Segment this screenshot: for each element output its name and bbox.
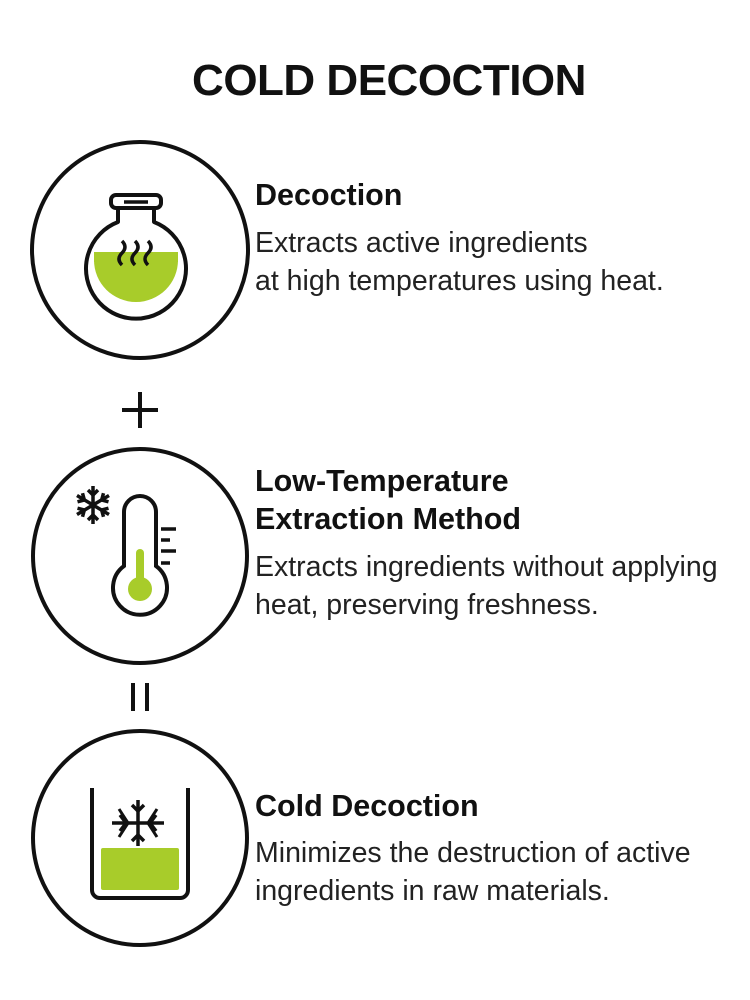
- icon: flask circle: [32, 142, 248, 358]
- text: cold decoction: ingredients in raw materials.: [255, 875, 610, 907]
- equals: [133, 683, 147, 711]
- heading: decoction: Decoction: [255, 178, 402, 212]
- text: decoction: [255, 227, 664, 297]
- icon: thermometer circle: [33, 449, 247, 663]
- heading: low-temperature: Extraction Method: [255, 502, 521, 536]
- heading: low-temperature: Low-Temperature: [255, 464, 509, 498]
- heading: low-temperature: [255, 464, 521, 536]
- text: low-temperature: Extracts ingredients without applying: [255, 551, 718, 583]
- heading: cold decoction: Cold Decoction: [255, 789, 479, 823]
- icon: beaker circle: [33, 731, 247, 945]
- text: low-temperature: heat, preserving freshness.: [255, 589, 599, 621]
- text: decoction: at high temperatures using heat.: [255, 265, 664, 297]
- title: COLD DECOCTION: [192, 56, 586, 105]
- plus: [122, 392, 158, 428]
- text: cold decoction: Minimizes the destruction of active: [255, 837, 691, 869]
- text: low-temperature: [255, 551, 718, 621]
- text: decoction: Extracts active ingredients: [255, 227, 588, 259]
- text: cold decoction: [255, 837, 691, 907]
